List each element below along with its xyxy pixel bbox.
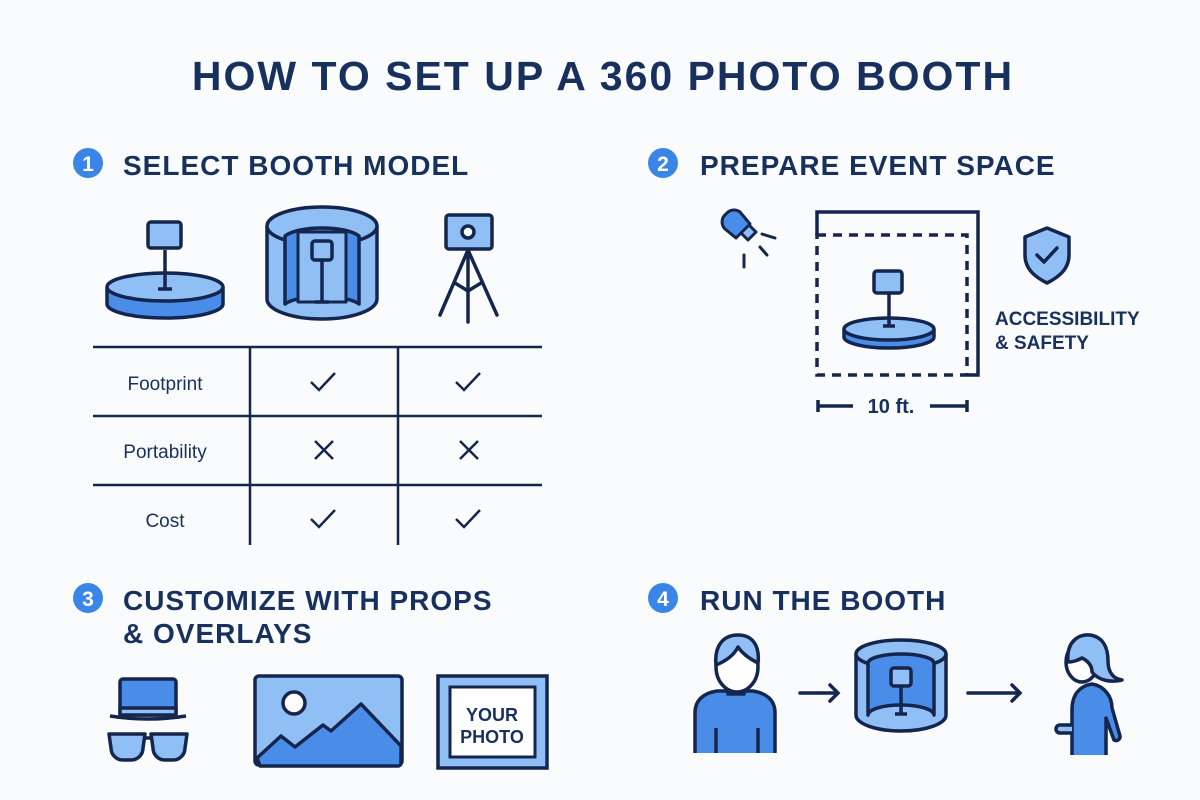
- heading: step 3: & OVERLAYS: [123, 618, 312, 649]
- arrow: [800, 685, 838, 701]
- comparison table: Cost: [145, 511, 185, 532]
- icon: hat and glasses: [109, 679, 187, 760]
- comparison table: Footprint: [128, 374, 203, 395]
- heading: step 3: 3: [82, 588, 94, 611]
- heading: step 2: 2: [657, 153, 669, 176]
- icon: your photo frame: YOUR: [466, 705, 518, 725]
- measurement 10 ft: [818, 396, 967, 418]
- heading: step 1: 1: [82, 153, 94, 176]
- title: HOW TO SET UP A 360 PHOTO BOOTH: [192, 53, 1014, 99]
- text: accessibility & safety: ACCESSIBILITY: [995, 309, 1140, 330]
- measurement 10 ft: 10 ft.: [868, 396, 914, 418]
- comparison table: Portability: [123, 442, 207, 463]
- heading: step 3: CUSTOMIZE WITH PROPS: [123, 585, 492, 616]
- icon: enclosed booth: [267, 207, 377, 319]
- panel: step 1 select booth model: [73, 148, 542, 545]
- comparison table: [93, 347, 542, 545]
- arrow: [968, 685, 1020, 701]
- icon: guest person: [1056, 635, 1122, 755]
- text: accessibility & safety: [995, 309, 1140, 354]
- icon: picture frame: [255, 676, 402, 766]
- icon: shield: [1025, 228, 1069, 283]
- panel: step 4 run the booth: [648, 583, 1122, 755]
- panel: step 2 prepare event space: [648, 148, 1140, 418]
- heading: step 1: SELECT BOOTH MODEL: [123, 150, 469, 181]
- icon: enclosed booth: [856, 640, 946, 731]
- heading: step 4: 4: [657, 588, 669, 611]
- text: accessibility & safety: & SAFETY: [995, 333, 1089, 354]
- icon: light: [722, 210, 775, 267]
- heading: step 3: [73, 583, 492, 649]
- icon: turntable booth: [107, 222, 223, 318]
- icon: your photo frame: PHOTO: [460, 727, 524, 747]
- heading: step 4: RUN THE BOOTH: [700, 585, 946, 616]
- icon: attendant person: [695, 635, 775, 753]
- heading: step 2: PREPARE EVENT SPACE: [700, 150, 1056, 181]
- space diagram: [817, 212, 978, 418]
- panel: step 3 customize: [73, 583, 547, 768]
- icon: tripod camera: [440, 215, 497, 322]
- icon: your photo frame: [438, 676, 547, 768]
